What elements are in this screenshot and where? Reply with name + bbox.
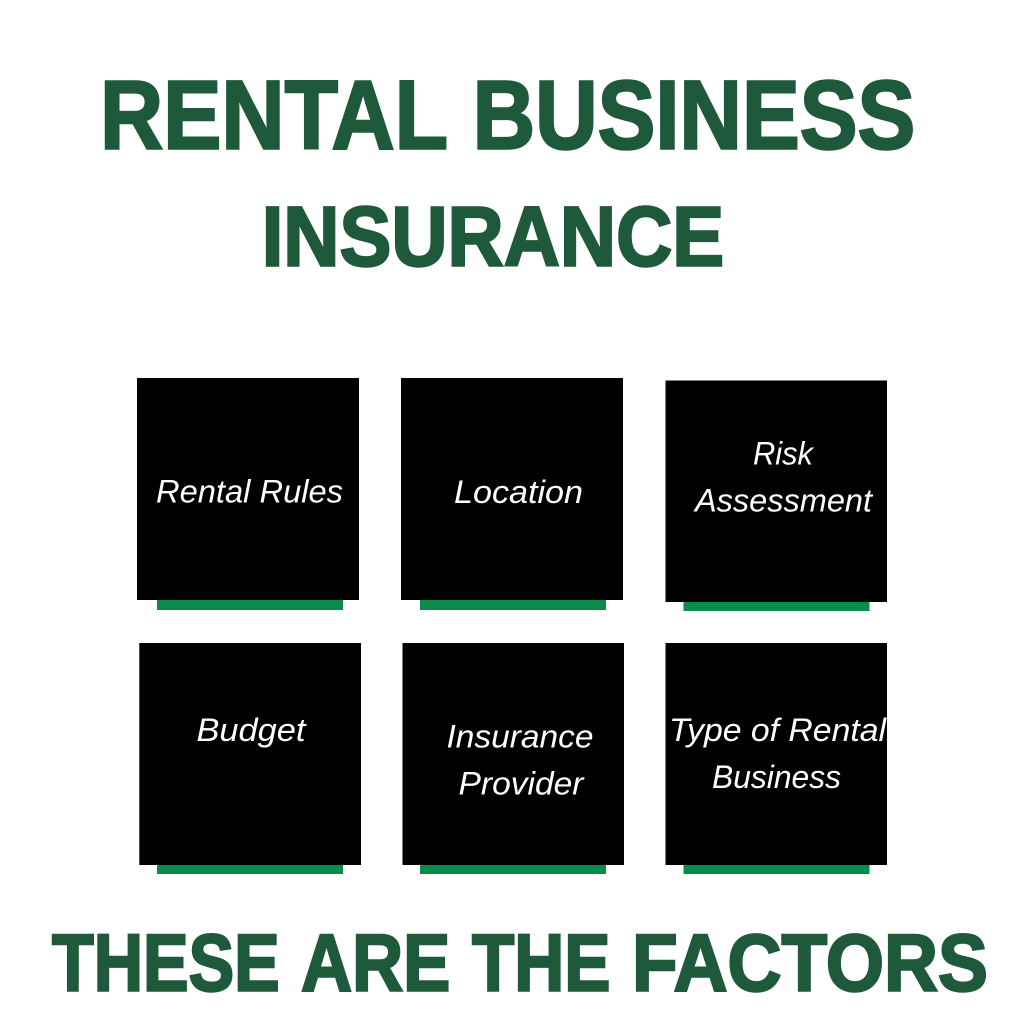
- card label: Location: [454, 474, 583, 510]
- card accent: [157, 600, 343, 610]
- card label: Risk: [753, 436, 815, 472]
- card accent: [684, 602, 870, 611]
- card label: [446, 719, 594, 801]
- card label: Type of Rental: [669, 712, 887, 748]
- card: Insurance Provider: [402, 643, 624, 874]
- footer heading: THESE: [52, 919, 280, 1009]
- card label: [693, 436, 874, 519]
- card label: Rental Rules: [156, 474, 343, 510]
- footer heading: FACTORS: [632, 919, 988, 1009]
- title line 2: INSURANCE: [262, 190, 724, 284]
- card: Type of Rental Business: [666, 643, 887, 874]
- footer heading: THE: [472, 919, 610, 1009]
- title line 1: BUSINESS: [473, 60, 915, 170]
- card panel: [402, 643, 624, 865]
- card: Budget: [139, 643, 361, 874]
- card panel: [666, 643, 887, 865]
- card panel: [137, 378, 359, 600]
- card panel: [666, 380, 887, 602]
- footer heading: ARE: [301, 919, 450, 1009]
- card label: Provider: [458, 765, 585, 801]
- card label: Assessment: [693, 483, 874, 519]
- card panel: [401, 378, 623, 600]
- card label: [669, 712, 887, 795]
- card label: Business: [712, 759, 841, 795]
- card: Risk Assessment: [666, 380, 887, 611]
- footer heading: [52, 919, 988, 1009]
- card accent: [684, 865, 870, 874]
- title line 1: [100, 60, 915, 170]
- card label: Insurance: [446, 719, 594, 755]
- card: Rental Rules: [137, 378, 359, 610]
- card accent: [157, 865, 343, 874]
- title line 1: RENTAL: [100, 60, 448, 170]
- card panel: [139, 643, 361, 865]
- card label: Budget: [196, 712, 308, 748]
- card: Location: [401, 378, 623, 610]
- card accent: [420, 600, 606, 610]
- card accent: [420, 865, 606, 874]
